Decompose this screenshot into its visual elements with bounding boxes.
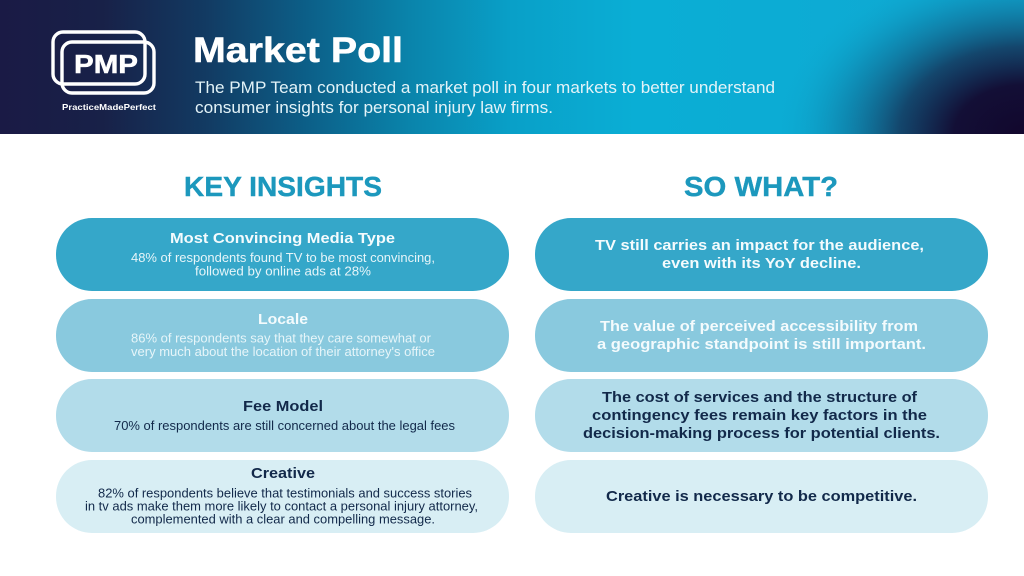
icon: PMP logo: PMP (74, 49, 138, 79)
panel: so what accessibility: a geographic standpoint is still important. (597, 336, 926, 353)
title: Market Poll (193, 31, 403, 70)
panel: locale: Locale (258, 311, 308, 328)
panel: creative: complemented with a clear and compelling message. (131, 512, 435, 526)
header banner (0, 0, 1024, 134)
panel: so what accessibility (535, 299, 988, 372)
icon: PMP logo: PracticeMadePerfect (62, 102, 156, 112)
panel: most convincing media type (56, 218, 509, 291)
header description: consumer insights for personal injury law firms. (195, 98, 553, 117)
icon: PMP logo (53, 32, 156, 112)
heading: so what: SO WHAT? (684, 171, 838, 202)
panel: so what tv impact: TV still carries an impact for the audience, (595, 237, 924, 254)
header description: The PMP Team conducted a market poll in four markets to better understand (195, 78, 775, 97)
panel: most convincing media type: 48% of respondents found TV to be most convincing, (131, 251, 435, 265)
panel: so what cost of services: contingency fees remain key factors in the (592, 407, 927, 424)
header description (195, 78, 775, 117)
panel: creative: in tv ads make them more likely to contact a personal injury attorney, (85, 500, 478, 514)
panel: fee model: 70% of respondents are still concerned about the legal fees (114, 419, 455, 433)
panel: creative: Creative (251, 465, 315, 482)
panel: so what tv impact: even with its YoY decline. (662, 255, 861, 272)
panel: so what cost of services (535, 379, 988, 452)
panel: most convincing media type: Most Convincing Media Type (170, 230, 395, 247)
panel: most convincing media type: followed by online ads at 28% (195, 264, 371, 278)
panel: so what creative: Creative is necessary to be competitive. (606, 488, 917, 505)
panel: so what cost of services: decision-making process for potential clients. (583, 425, 940, 442)
heading: key insights: KEY INSIGHTS (184, 171, 382, 202)
panel: creative (56, 460, 509, 533)
panel: so what accessibility: The value of perceived accessibility from (600, 318, 918, 335)
panel: so what tv impact (535, 218, 988, 291)
panel: fee model: Fee Model (243, 398, 323, 415)
panel: fee model (56, 379, 509, 452)
panel: locale: 86% of respondents say that they care somewhat or (131, 332, 431, 346)
panel: creative: 82% of respondents believe that testimonials and success stories (98, 486, 472, 500)
panel: so what cost of services: The cost of services and the structure of (602, 389, 918, 406)
panel: locale (56, 299, 509, 372)
panel: so what creative (535, 460, 988, 533)
panel: locale: very much about the location of their attorney's office (131, 345, 435, 359)
